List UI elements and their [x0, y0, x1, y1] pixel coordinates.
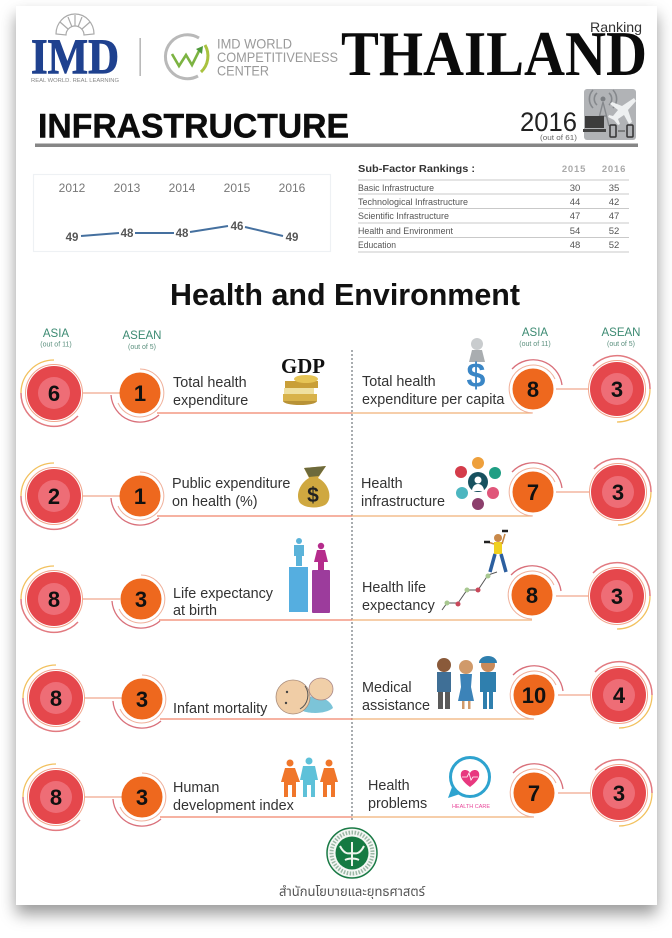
label: infrastructure: [361, 494, 445, 510]
asean rank 1: [111, 472, 164, 525]
row: medical assistance: [352, 656, 652, 728]
icon: health network: [455, 457, 501, 510]
asean rank 3: [590, 760, 652, 826]
label: on health (%): [172, 494, 258, 510]
table rows: Technological Infrastructure: [358, 197, 468, 207]
asean rank 3: 3: [612, 480, 624, 505]
column header: ASEAN right: (out of 5): [607, 341, 635, 348]
asean rank 4: 4: [613, 683, 626, 708]
icon: male and female on bars: [289, 538, 330, 613]
label: Medical: [362, 680, 412, 696]
column header: ASEAN left: (out of 5): [128, 344, 156, 351]
asia rank 8: [21, 566, 82, 632]
ministry seal: [327, 828, 377, 878]
table header: 2015: [562, 164, 586, 175]
asia rank 6: 6: [48, 381, 60, 406]
asia rank 8: [508, 566, 561, 619]
table rows: 47: [609, 211, 619, 222]
asean rank 3: [588, 356, 650, 422]
chart values: 46: [231, 221, 243, 233]
asia rank 7: [509, 463, 562, 516]
asia rank 2: 2: [48, 484, 60, 509]
asia rank 10: 10: [522, 683, 546, 708]
table rows: 42: [609, 197, 619, 208]
label: [362, 374, 504, 408]
asean rank 3: [113, 675, 166, 728]
column header: ASEAN right: ASEAN: [602, 327, 640, 339]
asean rank 1: 1: [134, 484, 146, 509]
asia rank 8: 8: [526, 583, 538, 608]
asean rank 3: 3: [611, 584, 623, 609]
label: Infant mortality: [173, 701, 268, 717]
column header: ASIA right: ASIA: [522, 327, 548, 339]
chart years: 2016: [279, 181, 306, 195]
label: expenditure: [173, 393, 248, 409]
column header: ASIA right: (out of 11): [519, 341, 551, 348]
row: human development index: [23, 758, 352, 830]
label: Health: [368, 778, 410, 794]
asia rank 8: [23, 764, 84, 830]
asia rank 7: 7: [527, 480, 539, 505]
column header: ASEAN left: [122, 330, 162, 351]
icon: person on dollar sign: [467, 338, 486, 395]
table header: 2016: [602, 164, 626, 175]
chart years: 2012: [59, 181, 86, 195]
chart: overall ranking trend: [34, 174, 330, 252]
year: 2016: 2016: [520, 107, 577, 137]
label: Ranking: Ranking: [590, 19, 642, 35]
heading: INFRASTRUCTURE: INFRASTRUCTURE: [38, 108, 349, 146]
row: infant mortality: [23, 665, 352, 731]
asean rank 1: 1: [134, 381, 146, 406]
header: competitiveness center logo: COMPETITIVENESS: [217, 49, 338, 65]
asean rank 3: 3: [613, 781, 625, 806]
icon: GDP coins: [281, 354, 325, 405]
asean rank 3: [588, 563, 650, 629]
icon: person on dollar sign: $: [467, 357, 486, 395]
asia rank 8: 8: [527, 377, 539, 402]
label: Public expenditure: [172, 476, 290, 492]
heading rule: [35, 144, 638, 147]
asean rank 4: [590, 662, 652, 728]
asia rank 8: [509, 360, 562, 413]
table rows: [358, 183, 619, 251]
icon: three people: [281, 758, 338, 797]
row: total health expenditure: [21, 354, 352, 426]
section title: Health and Environment: Health and Environment: [170, 277, 520, 312]
table rows: 54: [570, 226, 580, 237]
table rows: 52: [609, 240, 619, 251]
table rows: 35: [609, 183, 619, 194]
label: [173, 586, 274, 619]
icon: money bag: [298, 466, 329, 507]
table rows: Education: [358, 240, 396, 250]
table header: Sub-Factor Rankings :: [358, 163, 475, 175]
table rows: Scientific Infrastructure: [358, 211, 449, 221]
note: out of 61: (out of 61): [540, 133, 578, 142]
column header: ASIA right: [519, 327, 551, 348]
asia rank 8: 8: [50, 785, 62, 810]
table: sub-factor rankings: [358, 163, 629, 252]
asia rank 8: 8: [50, 686, 62, 711]
asia rank 8: 8: [48, 587, 60, 612]
label: Total health: [173, 375, 247, 391]
asean rank 3: [590, 459, 651, 525]
table rows: 47: [570, 211, 580, 222]
label: Life expectancy: [173, 586, 274, 602]
icon: infrastructure: [583, 89, 636, 140]
center dotted divider: [351, 350, 353, 820]
table rows: 48: [570, 240, 580, 251]
chart values: [66, 221, 298, 244]
chart values: 49: [66, 232, 78, 244]
label: Human: [173, 780, 219, 796]
column header: ASIA left: (out of 11): [40, 342, 72, 348]
column header: ASEAN left: ASEAN: [122, 330, 162, 342]
label: [368, 778, 427, 812]
chart years: 2013: [114, 181, 141, 195]
asia rank 10: [510, 666, 563, 719]
header: IMD logo: REAL WORLD. REAL LEARNING: [31, 78, 119, 84]
table rows: Basic Infrastructure: [358, 183, 434, 193]
row: life expectancy at birth: [21, 538, 352, 632]
department name: สำนักนโยบายและยุทธศาสตร์: [279, 884, 426, 899]
table rows: Health and Environment: [358, 226, 453, 236]
label: Health life: [362, 580, 426, 596]
header: competitiveness center logo: IMD WORLD: [217, 36, 292, 52]
asia rank 6: [21, 360, 82, 426]
asia rank 7: 7: [528, 781, 540, 806]
asean rank 1: [111, 369, 164, 422]
icon: baby: [276, 678, 333, 714]
asean rank 3: 3: [611, 377, 623, 402]
icon: GDP coins: GDP: [281, 354, 325, 378]
label: assistance: [362, 698, 430, 714]
asean rank 3: [113, 773, 166, 826]
header divider: [140, 38, 141, 76]
row: health life expectancy: [352, 531, 650, 629]
asean rank 3: [112, 575, 165, 628]
column header: ASIA left: [40, 328, 72, 348]
label: development index: [173, 798, 295, 814]
icon: money bag: $: [307, 484, 319, 507]
label: [172, 476, 290, 510]
header: IMD logo: IMD: [31, 28, 119, 84]
header: competitiveness center logo: CENTER: [217, 62, 269, 78]
header: competitiveness center logo: [165, 35, 338, 79]
label: Total health: [362, 374, 436, 390]
icon: health care bubble: HEALTH CARE: [452, 804, 490, 810]
label: [362, 580, 436, 614]
label: [173, 780, 295, 814]
chart years: 2015: [224, 181, 251, 195]
label: expenditure per capita: [362, 392, 504, 408]
label: problems: [368, 796, 427, 812]
label: at birth: [173, 603, 217, 619]
table rows: 44: [570, 197, 580, 208]
asia rank 7: [510, 764, 563, 817]
chart values: 48: [121, 228, 134, 240]
label: [361, 476, 445, 510]
table rows: 30: [570, 183, 580, 194]
row: public expenditure on health: [21, 463, 352, 529]
column header: ASIA left: ASIA: [43, 328, 69, 340]
label: [173, 375, 248, 409]
column header: ASEAN right: [602, 327, 640, 348]
label: expectancy: [362, 598, 436, 614]
asia rank 8: [23, 665, 84, 731]
table header: [358, 163, 626, 175]
row: total health expenditure per capita: [352, 338, 650, 422]
asia rank 2: [21, 463, 82, 529]
asean rank 3: 3: [136, 687, 148, 712]
asean rank 3: 3: [135, 587, 147, 612]
chart values: 48: [176, 228, 189, 240]
chart years: 2014: [169, 181, 196, 195]
table rows: 52: [609, 226, 619, 237]
row: health infrastructure: [352, 457, 651, 525]
asean rank 3: 3: [136, 785, 148, 810]
chart line: [81, 226, 283, 236]
icon: climbing figure with dumbbells: [442, 531, 508, 610]
label: [362, 680, 430, 714]
icon: health care bubble: [448, 758, 490, 810]
icon: medical staff: [437, 656, 497, 709]
label: Health: [361, 476, 403, 492]
chart values: 49: [286, 232, 298, 244]
chart years: [59, 181, 306, 195]
row: health problems: [352, 758, 652, 826]
title: THAILAND: THAILAND: [341, 19, 647, 89]
